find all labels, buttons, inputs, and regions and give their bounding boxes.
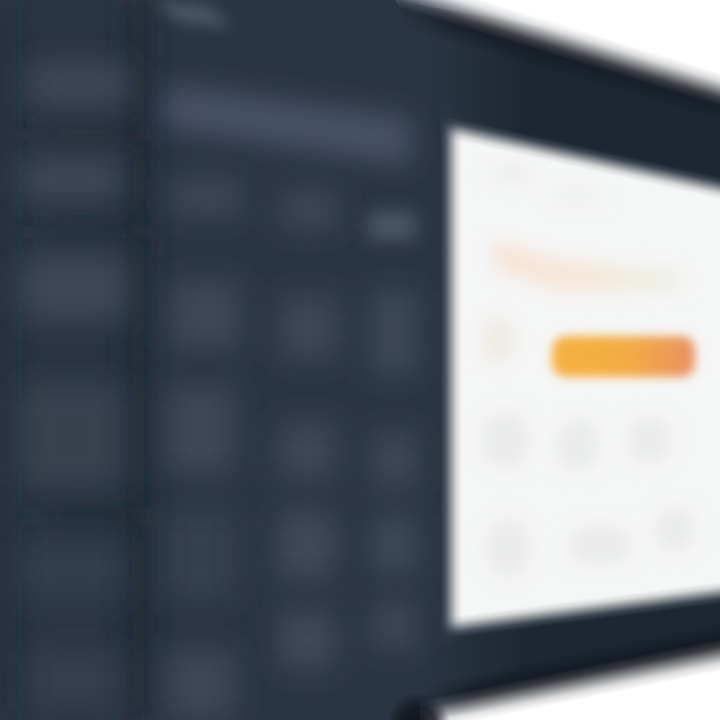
small round icon <box>480 316 516 364</box>
orange highlighted button <box>552 336 695 377</box>
highlighted table cell <box>368 212 416 240</box>
data table: blurred cells <box>22 62 417 720</box>
panel soft left edge <box>440 105 464 645</box>
near-black edge at bottom of bezel <box>436 632 720 714</box>
column shading <box>0 0 148 720</box>
white background top right <box>395 0 720 130</box>
column three cells <box>372 290 417 650</box>
panel upper half <box>440 100 720 380</box>
sidebar rows <box>22 62 128 710</box>
top caption smudge <box>155 0 232 28</box>
dark corner at bottom of screen <box>386 690 450 720</box>
orange trend line <box>492 240 680 292</box>
near-black edge at top of bezel <box>411 4 720 109</box>
white background bottom right <box>420 620 720 720</box>
dark screen bezel <box>425 0 720 720</box>
table header band <box>165 85 410 165</box>
column two cells <box>278 190 338 670</box>
white report panel <box>440 100 720 680</box>
column one cells <box>165 178 242 720</box>
panel lower half <box>440 380 720 680</box>
lower grid cells <box>481 412 695 578</box>
panel heading smudge <box>492 165 600 202</box>
